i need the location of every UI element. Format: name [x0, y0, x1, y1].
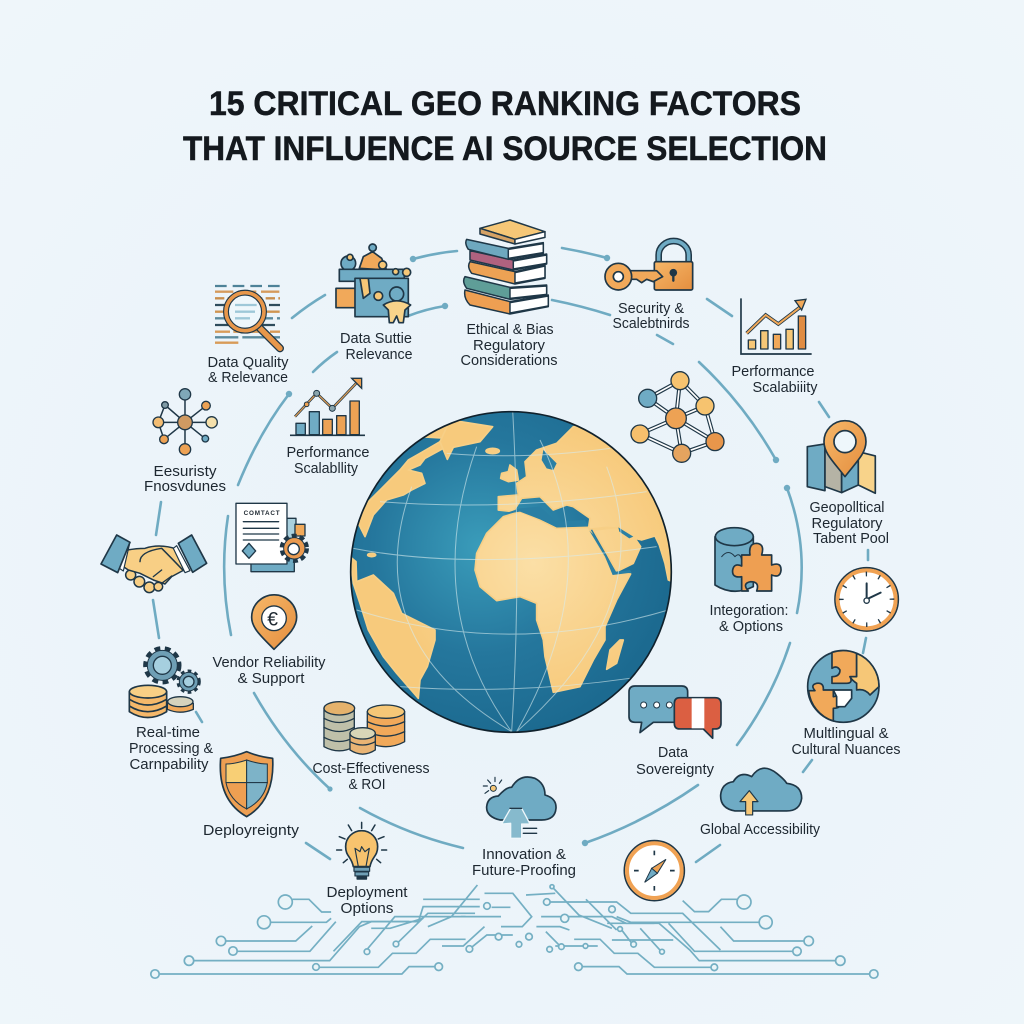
label: geopolitical: Geopolltical: [810, 500, 884, 516]
label: integration: & Options: [719, 619, 783, 635]
label: performance scalability right: [732, 364, 818, 396]
icon: cloud upload: [721, 768, 802, 815]
label: deployment options: Options: [340, 901, 394, 917]
label: data suite relevance: Relevance: [346, 347, 412, 363]
label: real-time processing: Processing &: [129, 741, 213, 757]
globe: [350, 410, 677, 733]
label: data sovereignty: Sovereignty: [636, 762, 715, 778]
label: deployment options: [326, 885, 408, 917]
icon: stack of books: [464, 220, 548, 314]
icon: hub network: [153, 389, 217, 455]
label: ethical and bias: [460, 322, 558, 369]
label: global accessibility: Global Accessibility: [700, 822, 821, 838]
label: data quality: Data Quality: [208, 355, 289, 371]
label: cost effectiveness: Cost-Effectiveness: [312, 761, 430, 777]
label: integration: [710, 603, 788, 635]
icon: puzzle globe: [808, 651, 879, 722]
icon: clock: [835, 568, 898, 631]
label: ethical and bias: Considerations: [460, 353, 558, 369]
icon: speech bubbles: [629, 686, 721, 738]
label: ethical and bias: Regulatory: [473, 338, 546, 354]
label: innovation: Innovation &: [482, 847, 566, 863]
icon: key and lock: [605, 241, 693, 290]
inland seas: [503, 450, 633, 575]
label: data suite relevance: [340, 331, 412, 363]
icon: compass: [624, 841, 684, 901]
label: innovation: Future-Proofing: [472, 863, 576, 879]
label: data quality: & Relevance: [208, 370, 288, 386]
icon: innovation cloud: [483, 777, 556, 838]
title: 15 CRITICAL GEO RANKING FACTORS: [209, 85, 801, 123]
label: integration: Integoration:: [710, 603, 788, 619]
icon: euro pin: €: [267, 609, 278, 630]
icon: team network: [336, 244, 411, 323]
label: security procedures: Fnosvdunes: [144, 479, 226, 495]
label: data sovereignty: [636, 745, 715, 778]
icon: coin stacks: [324, 702, 405, 754]
label: data suite relevance: Data Suttie: [340, 331, 412, 347]
label: vendor reliability: Vendor Reliability: [212, 655, 326, 671]
icon: contract: [236, 503, 306, 572]
icon: database and puzzle: [715, 528, 781, 591]
icon: magnifier over data: [215, 286, 280, 348]
label: performance scalability left: [286, 445, 370, 477]
icon: map pin: [807, 421, 875, 493]
label: performance scalability left: Performance: [286, 445, 370, 461]
label: deployreignty: Deployreignty: [203, 823, 300, 839]
label: cost effectiveness: & ROI: [348, 777, 386, 793]
icon: molecule network: [631, 372, 724, 462]
icon: handshake: [101, 535, 207, 593]
label: cost effectiveness: [312, 761, 430, 793]
continents: [350, 420, 677, 698]
label: security procedures: [144, 464, 226, 495]
label: data sovereignty: Data: [658, 745, 689, 761]
circuit board traces: [151, 885, 878, 978]
label: security: Security &: [618, 301, 684, 317]
label: security: [612, 301, 690, 332]
label: vendor reliability: & Support: [238, 671, 304, 687]
icon: euro pin: [252, 595, 297, 649]
icon: gears and coin stack: [129, 650, 198, 717]
label: geopolitical: Regulatory: [812, 516, 883, 532]
icon: bar chart left: [290, 378, 365, 435]
label: real-time processing: [129, 725, 213, 773]
label: multilingual: Multlingual &: [804, 726, 889, 742]
connector rings: [153, 248, 868, 862]
icon: light bulb: [337, 822, 387, 879]
label: ethical and bias: Ethical & Bias: [466, 322, 554, 338]
icon: shield: [220, 752, 273, 817]
title: THAT INFLUENCE AI SOURCE SELECTION: [183, 130, 827, 168]
label: performance scalability right: Scalabiiity: [752, 380, 818, 396]
label: innovation: [472, 847, 576, 879]
label: performance scalability right: Performance: [732, 364, 814, 380]
label: real-time processing: Real-time: [136, 725, 200, 741]
icon: contract: COMTACT: [244, 510, 280, 517]
label: security: Scalebtnirds: [612, 316, 690, 332]
label: performance scalability left: Scalabllity: [294, 461, 359, 477]
label: deployment options: Deployment: [326, 885, 408, 901]
label: data quality: [208, 355, 289, 386]
label: geopolitical: Tabent Pool: [813, 531, 889, 547]
label: security procedures: Eesuristy: [154, 464, 217, 480]
label: multilingual: [792, 726, 900, 758]
latitude and longitude lines: [353, 410, 668, 732]
icon: growth chart right: [741, 298, 812, 354]
label: vendor reliability: [212, 655, 326, 687]
label: multilingual: Cultural Nuances: [792, 742, 900, 758]
label: real-time processing: Carnpability: [130, 757, 209, 773]
title: [183, 85, 827, 168]
label: geopolitical: [810, 500, 889, 547]
